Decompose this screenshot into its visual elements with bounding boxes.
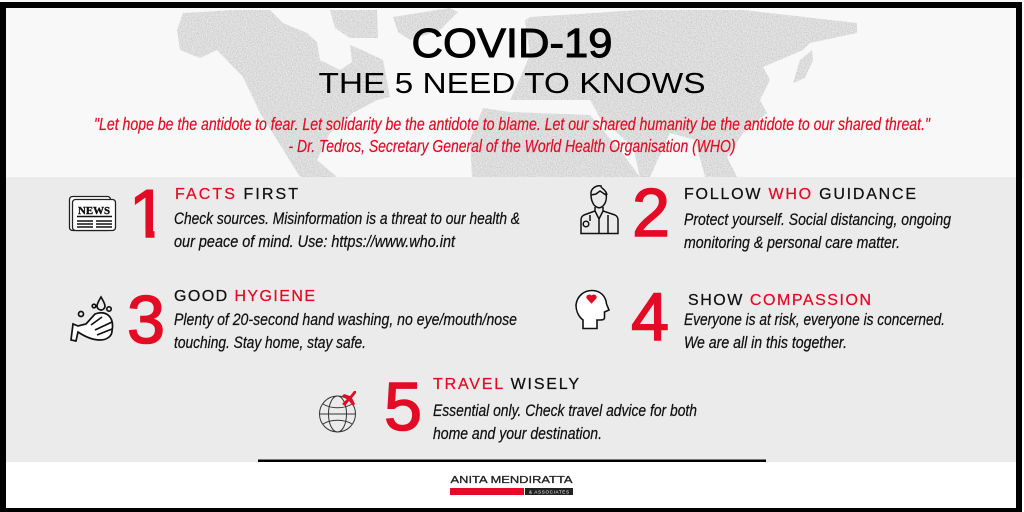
body text bbox=[433, 401, 697, 443]
item 4: show compassion bbox=[576, 279, 945, 355]
title: COVID-19 bbox=[412, 20, 612, 66]
quote: - Dr. Tedros, Secretary General of the World Health Organisation (WHO) bbox=[288, 136, 736, 156]
number 5: 5 bbox=[384, 369, 422, 445]
body text: touching. Stay home, stay safe. bbox=[174, 333, 366, 352]
world map background bbox=[177, 8, 857, 177]
body text bbox=[174, 310, 517, 352]
heading: follow WHO guidance: FOLLOW WHO GUIDANCE bbox=[684, 186, 916, 203]
logo: Anita Mendiratta & Associates bbox=[450, 474, 573, 495]
icon: washing hands bbox=[71, 297, 113, 341]
heading: facts first: FACTS FIRST bbox=[175, 186, 298, 203]
heading: show compassion: SHOW COMPASSION bbox=[688, 292, 871, 309]
grey content panel bbox=[6, 177, 1016, 462]
icon: newspaper bbox=[70, 196, 116, 230]
logo: Anita Mendiratta & Associates: ANITA MENDIRATTA bbox=[450, 474, 572, 486]
number 3: 3 bbox=[127, 282, 165, 358]
body text: Check sources. Misinformation is a threat to our health & bbox=[174, 209, 520, 228]
subtitle: THE 5 NEED TO KNOWS bbox=[318, 68, 706, 100]
body text: We are all in this together. bbox=[684, 333, 847, 352]
item 5: travel wisely bbox=[320, 369, 697, 445]
item 2: follow WHO guidance bbox=[581, 175, 951, 252]
icon: plane bbox=[342, 391, 356, 406]
quote bbox=[94, 114, 931, 156]
item 1: facts first bbox=[70, 176, 520, 252]
paper background bbox=[0, 0, 1024, 178]
body text: home and your destination. bbox=[433, 424, 602, 443]
item 3: good hygiene bbox=[71, 282, 517, 358]
number 2: 2 bbox=[632, 175, 670, 251]
body text bbox=[174, 209, 520, 251]
body text: our peace of mind. Use: https://www.who.int bbox=[174, 232, 456, 251]
divider rule bbox=[258, 460, 766, 462]
number 1: 1 bbox=[129, 176, 167, 252]
heading: good hygiene: GOOD HYGIENE bbox=[174, 288, 315, 305]
icon: globe and plane bbox=[320, 391, 356, 432]
body text: Everyone is at risk, everyone is concerned. bbox=[684, 310, 945, 329]
body text bbox=[684, 210, 951, 252]
heading: travel wisely: TRAVEL WISELY bbox=[433, 376, 579, 393]
body text: Plenty of 20-second hand washing, no eye/mouth/nose bbox=[174, 310, 517, 329]
icon: head with heart bbox=[576, 290, 609, 328]
number 4: 4 bbox=[631, 279, 669, 355]
body text: Essential only. Check travel advice for both bbox=[433, 401, 697, 420]
icon: doctor bbox=[581, 186, 618, 234]
body text bbox=[684, 310, 945, 352]
body text: monitoring & personal care matter. bbox=[684, 233, 900, 252]
icon: newspaper: NEWS bbox=[78, 205, 110, 217]
body text: Protect yourself. Social distancing, ongoing bbox=[684, 210, 951, 229]
logo: Anita Mendiratta & Associates: & ASSOCIATES bbox=[529, 490, 569, 494]
